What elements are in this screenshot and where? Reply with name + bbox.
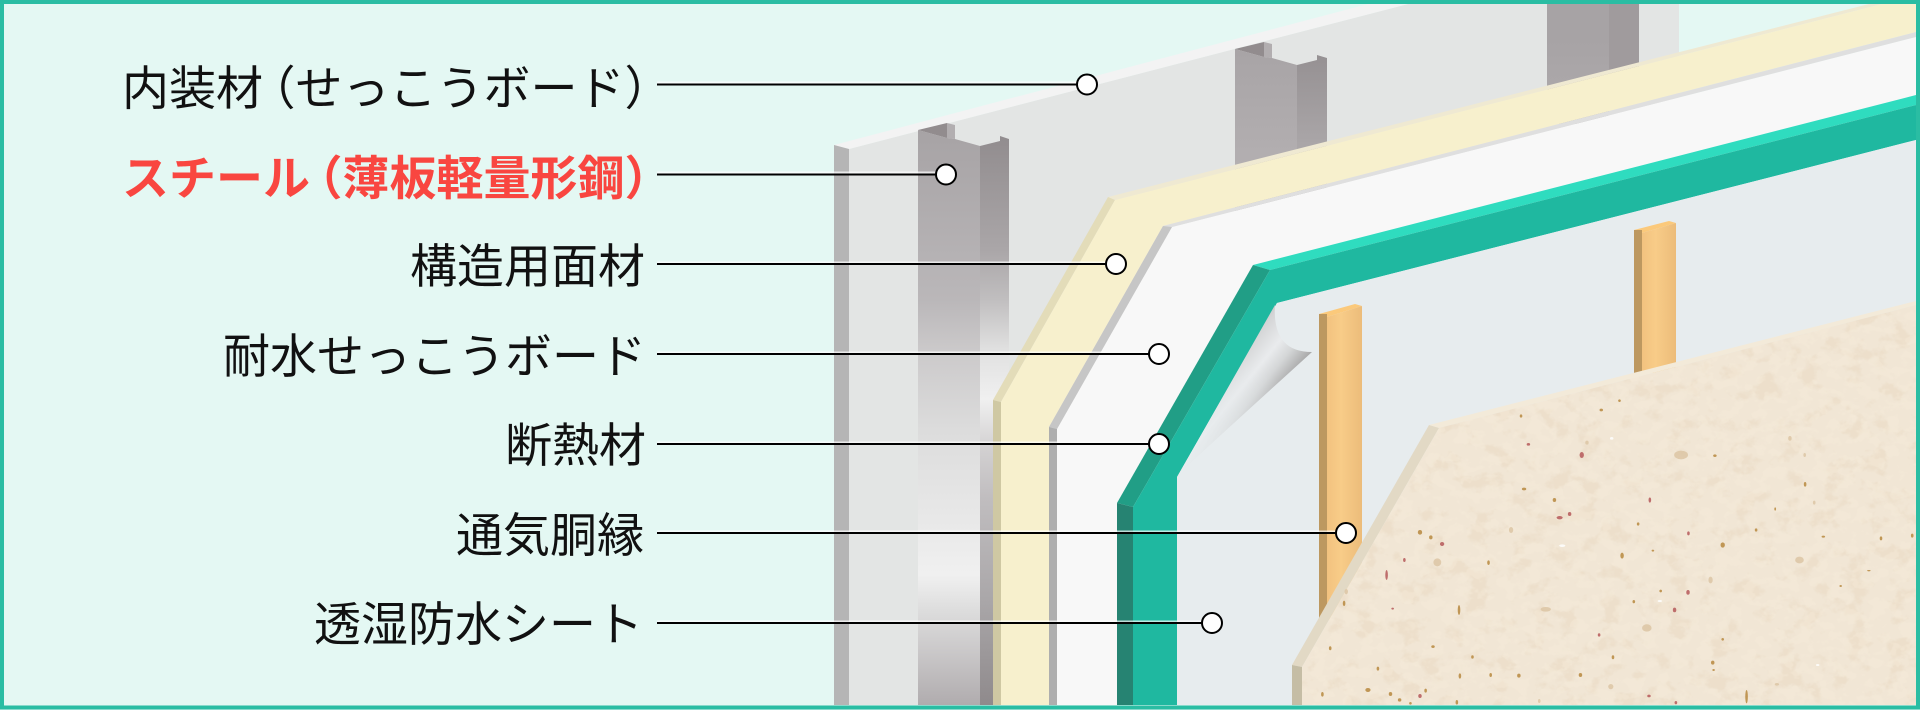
leader: water-resistant board [657, 344, 1169, 364]
steel stud: middle [1235, 42, 1327, 260]
furring strip: left [1319, 304, 1362, 620]
label: structural sheathing: 構造用面材 [410, 240, 645, 293]
leader: interior board [657, 74, 1097, 94]
label: furring strip: 通気胴縁 [456, 509, 644, 562]
peeled sheet corner [1180, 305, 1312, 472]
panel: interior gypsum board [834, 4, 1679, 705]
panel: breathable waterproof sheet [1177, 140, 1916, 705]
leader: steel [657, 164, 956, 184]
steel stud: far [1547, 4, 1639, 124]
panel: exterior stucco siding [1292, 301, 1916, 705]
leader: furring strip [657, 523, 1356, 543]
stucco speckles [1321, 399, 1914, 705]
furring strip: right [1634, 221, 1676, 373]
panel: structural sheathing [993, 4, 1916, 705]
label: insulation: 断熱材 [505, 419, 646, 472]
label: steel (highlighted): スチール（薄板軽量形鋼） [122, 152, 648, 205]
panel: insulation [1117, 95, 1916, 705]
label: breathable waterproof sheet: 透湿防水シート [314, 598, 643, 651]
panel: water-resistant gypsum board [1049, 32, 1916, 705]
label: interior material: 内装材（せっこうボード） [122, 62, 648, 115]
leader: waterproof sheet [657, 613, 1222, 633]
leader: structural sheathing [657, 254, 1126, 274]
leader: insulation [657, 434, 1169, 454]
steel stud: front [918, 123, 1009, 705]
label: water-resistant gypsum board: 耐水せっこうボード [223, 330, 646, 383]
